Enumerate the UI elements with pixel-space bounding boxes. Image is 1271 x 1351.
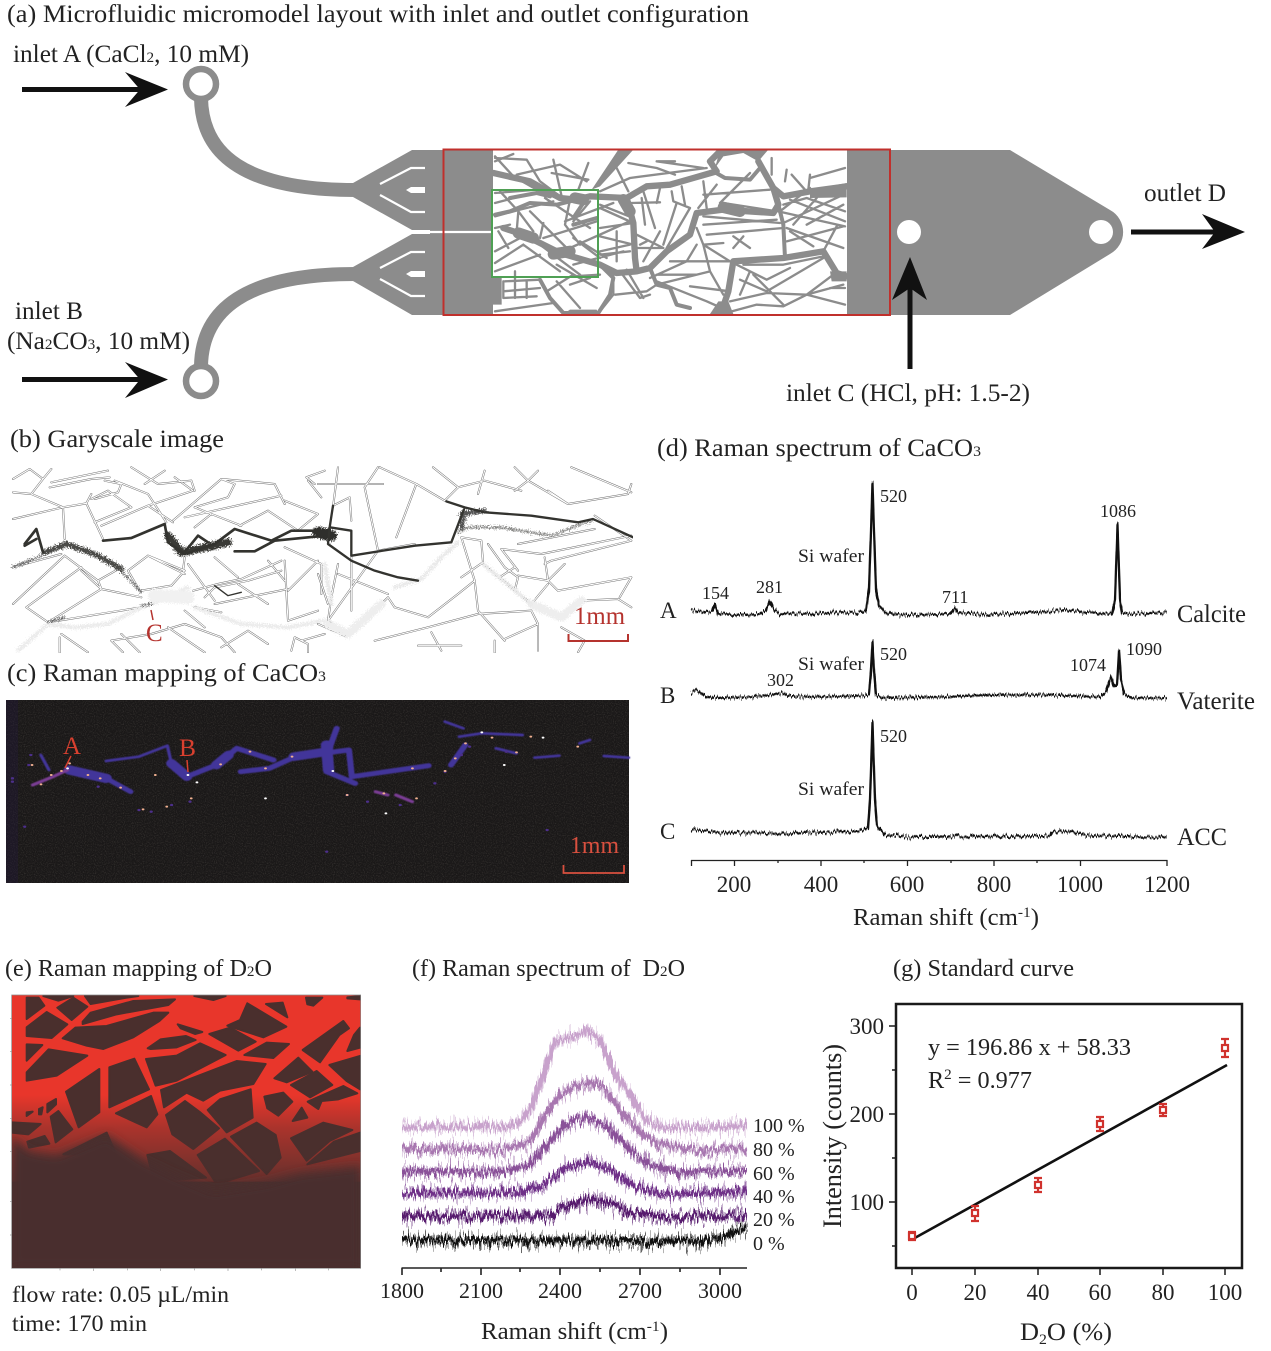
x axis title: D — [1020, 1319, 1038, 1346]
x axis: Raman shift: ) — [1031, 905, 1039, 931]
fit equation: R — [928, 1068, 944, 1094]
scale bar: 1 mm: 1mm — [570, 833, 619, 859]
label: outlet D: outlet D — [1144, 180, 1226, 207]
inlet A channel and port — [186, 69, 355, 190]
series labels: 40 % — [753, 1186, 795, 1208]
trace: 80 percent — [402, 1082, 747, 1150]
spectrum: B vaterite: Vaterite — [1177, 688, 1255, 715]
x axis labels: 80 — [1152, 1280, 1174, 1305]
D2O map image — [10, 995, 361, 1271]
ports on chip — [897, 220, 1113, 244]
y axis title: Intensity (counts) — [818, 1044, 847, 1228]
panel: (b) grayscale image — [10, 426, 633, 652]
data points with error bars — [908, 1039, 1229, 1240]
x axis title: 2 — [1039, 1332, 1047, 1348]
x axis: Raman shift: 400 — [804, 872, 838, 897]
fit equation: 2 — [944, 1067, 952, 1083]
spectrum: C ACC: Si wafer — [798, 779, 865, 800]
spectrum: A calcite: 281 — [756, 577, 783, 597]
heading: panel c: (c) Raman mapping of CaCO 3 — [7, 660, 326, 687]
series labels: 60 % — [753, 1163, 795, 1185]
x axis: Raman shift: Raman shift (cm — [853, 905, 1013, 931]
annotation: point C: C — [146, 620, 163, 647]
red imaging region box — [444, 150, 890, 315]
x axis: Raman shift: -1 — [1018, 905, 1031, 921]
panel: (a) micromodel layout — [7, 0, 1245, 407]
porous network area — [493, 150, 847, 315]
x axis labels: 60 — [1088, 1280, 1112, 1305]
spectrum: A calcite: A — [660, 598, 677, 623]
panel: (g) standard curve — [818, 956, 1242, 1348]
dark mapping background — [6, 700, 629, 883]
spectrum: B vaterite — [660, 639, 1255, 715]
arrow: inlet B — [22, 362, 168, 398]
x axis: Raman shift: ) — [660, 1319, 668, 1345]
caption: flow rate and time: time: 170 min — [12, 1311, 148, 1336]
spectrum: A calcite: 1086 — [1100, 501, 1136, 521]
label: inlet B — [7, 298, 190, 355]
spectrum: A calcite — [660, 483, 1246, 628]
x axis labels: 100 — [1208, 1280, 1242, 1305]
chip outline — [353, 150, 1123, 315]
annotation: point B: B — [179, 735, 196, 762]
y axis labels: 200 — [850, 1102, 884, 1127]
spectrum: B vaterite: 1074 — [1070, 655, 1106, 675]
series labels: 20 % — [753, 1209, 795, 1231]
label: inlet A: inlet A (CaCl2, 10 mM) — [13, 41, 249, 68]
arrow: inlet A — [22, 72, 168, 107]
x axis labels: 20 — [964, 1280, 986, 1305]
spectrum: B vaterite: 520 — [880, 644, 907, 664]
x axis: Raman shift: 1000 — [1057, 872, 1103, 897]
spectrum: A calcite: Calcite — [1177, 601, 1246, 628]
spectrum: B vaterite: 1090 — [1126, 639, 1162, 659]
spectrum: A calcite: 711 — [942, 587, 968, 607]
y axis labels — [850, 1014, 884, 1215]
spectrum: B vaterite: 302 — [767, 670, 794, 690]
heading: panel b: (b) Garyscale image — [10, 426, 224, 453]
arrow: outlet D — [1131, 214, 1245, 249]
bright speckles — [12, 732, 578, 852]
spectrum: B vaterite: B — [660, 683, 675, 708]
label: inlet B: inlet B — [15, 298, 83, 325]
spectrum: C ACC: ACC — [1177, 824, 1227, 851]
series labels: 80 % — [753, 1139, 795, 1161]
heading: panel g: (g) Standard curve — [893, 956, 1074, 982]
x axis: Raman shift: -1 — [647, 1319, 660, 1335]
scale bar: 1 mm — [564, 833, 624, 873]
micrograph: left half — [13, 467, 325, 652]
fit equation: = 0.977 — [952, 1068, 1032, 1094]
series labels — [753, 1115, 805, 1255]
fit line — [912, 1065, 1227, 1240]
porous network channels — [493, 150, 847, 314]
heading: panel f: (f) Raman spectrum of D2O — [412, 956, 685, 982]
heading: panel e: (e) Raman mapping of D2O — [5, 956, 272, 982]
x axis: Raman shift — [691, 860, 1190, 931]
heading: panel d: (d) Raman spectrum of CaCO 3 — [657, 435, 981, 462]
label: inlet B: (Na2CO3, 10 mM) — [7, 328, 190, 355]
trace: 100 percent — [402, 1030, 747, 1128]
label: inlet C: inlet C (HCl, pH: 1.5-2) — [786, 380, 1030, 407]
inlet B channel and port — [186, 274, 355, 396]
micrograph: right half — [318, 467, 633, 652]
fit equation: y = 196.86 x + 58.33 — [928, 1035, 1131, 1061]
spectrum: B vaterite: Si wafer — [798, 654, 865, 675]
trace: 40 percent — [402, 1162, 747, 1194]
series labels: 0 % — [753, 1233, 785, 1255]
x axis: Raman shift: 3000 — [698, 1278, 742, 1303]
y axis labels: 300 — [850, 1014, 884, 1039]
spectrum: C ACC — [660, 723, 1227, 851]
scale bar: 1 mm — [568, 603, 628, 641]
caption: flow rate and time — [12, 1282, 230, 1336]
x axis: Raman shift: 200 — [717, 872, 751, 897]
panel: (f) Raman spectrum of D2O — [380, 956, 805, 1345]
trace: 0 percent — [402, 1227, 747, 1241]
x axis: Raman shift: 1200 — [1144, 872, 1190, 897]
panel: (d) Raman spectrum of CaCO3 — [657, 435, 1255, 931]
spectrum: C ACC: 520 — [880, 726, 907, 746]
x axis labels: 40 — [1026, 1280, 1050, 1305]
trace: 20 percent — [402, 1199, 747, 1218]
x axis: Raman shift: 2700 — [618, 1278, 662, 1303]
micromodel chip body — [186, 69, 1123, 396]
annotation: point A: A — [63, 733, 81, 760]
y axis labels: 100 — [850, 1190, 884, 1215]
spectrum: C ACC: C — [660, 819, 675, 844]
spectrum: A calcite: 154 — [702, 583, 729, 603]
distributor slits — [380, 168, 491, 296]
arrow: inlet C — [892, 257, 927, 369]
panel: (e) Raman mapping of D2O — [5, 956, 361, 1336]
spectrum: A calcite: Si wafer — [798, 546, 865, 567]
scale bar: 1 mm: 1mm — [574, 603, 626, 630]
x axis: Raman shift — [380, 1268, 747, 1345]
x axis: Raman shift: 800 — [977, 872, 1011, 897]
series labels: 100 % — [753, 1115, 805, 1137]
green zoom region box — [492, 190, 598, 277]
spectrum: A calcite: 520 — [880, 486, 907, 506]
plot frame and ticks — [889, 1004, 1242, 1275]
x axis labels: 0 — [906, 1280, 918, 1305]
fit equation — [928, 1035, 1131, 1094]
x axis title: O (%) — [1047, 1319, 1112, 1346]
x axis labels — [906, 1280, 1242, 1305]
trace: 60 percent — [402, 1118, 747, 1172]
x axis: Raman shift: 600 — [890, 872, 924, 897]
x axis: Raman shift: 2400 — [538, 1278, 582, 1303]
x axis: Raman shift: Raman shift (cm — [481, 1319, 641, 1345]
caption: flow rate and time: flow rate: 0.05 µL/min — [12, 1282, 230, 1307]
x axis: Raman shift: 2100 — [459, 1278, 503, 1303]
grayscale micrograph — [13, 467, 633, 652]
panel: (c) Raman mapping of CaCO3 — [6, 660, 629, 883]
x axis: Raman shift: 1800 — [380, 1278, 424, 1303]
mapped carbonate trace — [33, 722, 629, 802]
spectra stack — [402, 1030, 747, 1241]
